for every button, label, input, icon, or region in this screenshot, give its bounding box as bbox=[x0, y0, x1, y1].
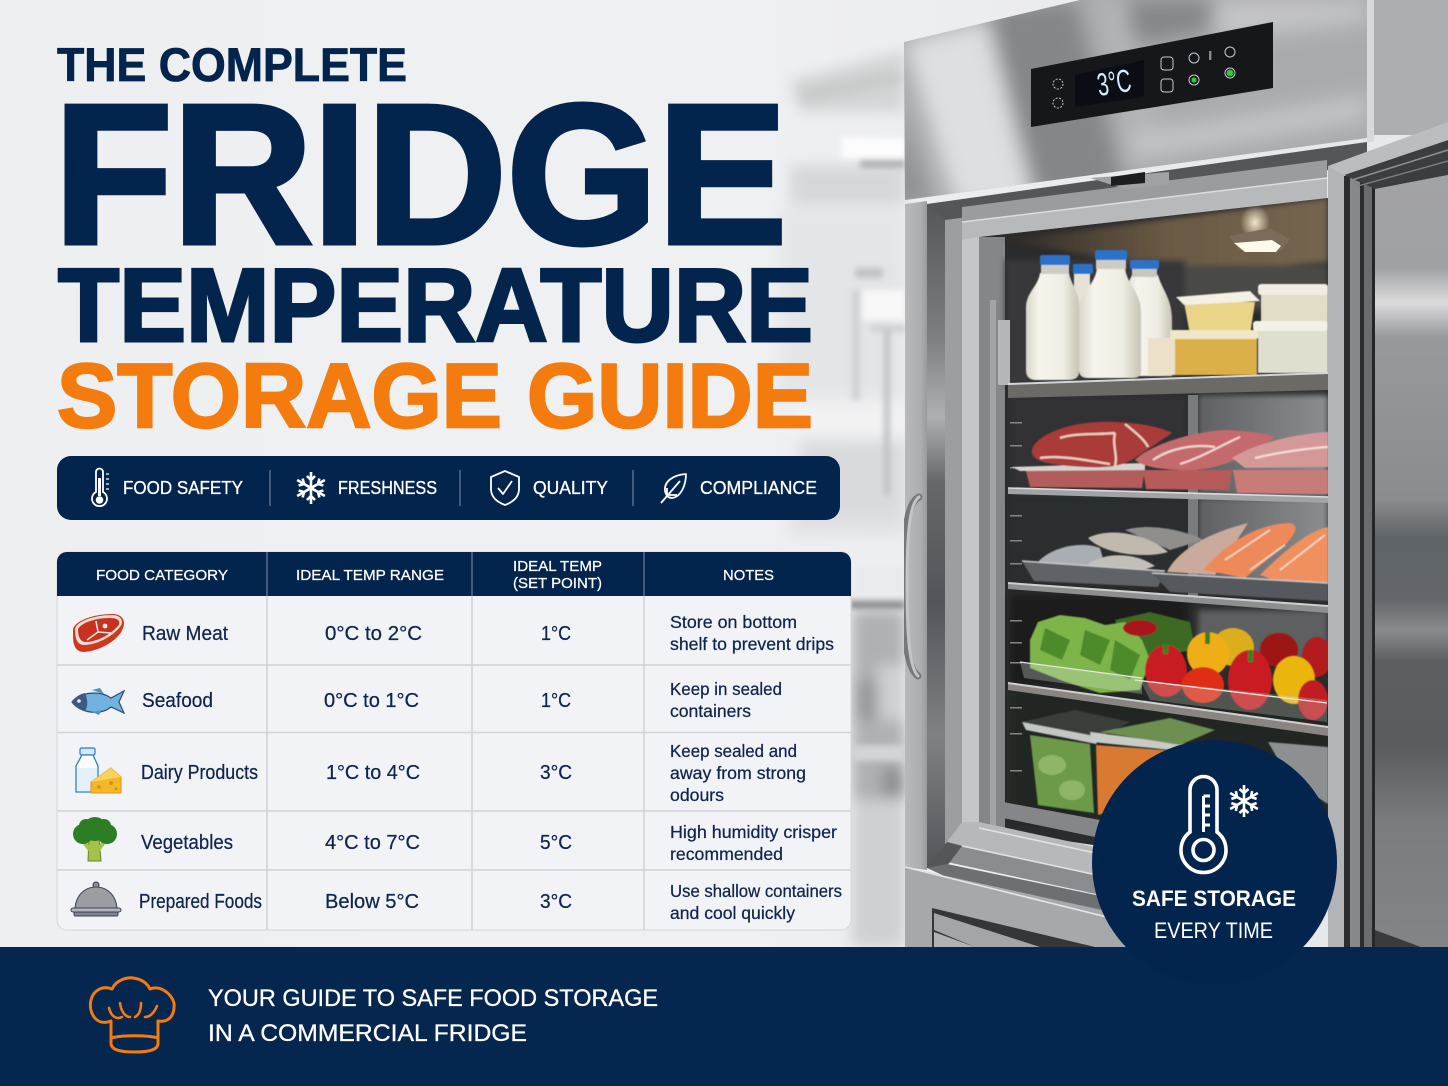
fridge top header panel bbox=[904, 0, 1367, 200]
title line: storage guide: STORAGE GUIDE bbox=[57, 346, 813, 447]
fourth wire shelf bbox=[1008, 683, 1328, 736]
footer text line 1: YOUR GUIDE TO SAFE FOOD STORAGE bbox=[208, 985, 658, 1012]
food storage table bbox=[57, 552, 851, 930]
fridge interior bbox=[979, 198, 1328, 880]
row: raw meat: 1°C bbox=[541, 623, 571, 645]
row: raw meat: Store on bottom bbox=[670, 612, 797, 632]
seafood trays bbox=[1022, 523, 1328, 601]
row: dairy products: Dairy Products bbox=[141, 762, 258, 784]
door top edge bbox=[1344, 140, 1448, 189]
lower vent grille bbox=[932, 908, 1095, 947]
interior floor bbox=[1003, 802, 1100, 838]
row: prepared foods: and cool quickly bbox=[670, 903, 795, 923]
row: seafood bbox=[72, 679, 782, 721]
label: freshness: FRESHNESS bbox=[338, 478, 437, 498]
row: raw meat bbox=[73, 612, 834, 654]
raw meat packs bbox=[1012, 422, 1328, 494]
fridge door handle bbox=[904, 497, 919, 676]
title bbox=[54, 38, 813, 447]
row: prepared foods: Prepared Foods bbox=[139, 891, 262, 913]
temperature reading: 3°C bbox=[1094, 62, 1134, 103]
row: dairy products: Keep sealed and bbox=[670, 741, 797, 761]
label: food safety: FOOD SAFETY bbox=[123, 478, 243, 498]
temperature control panel bbox=[1031, 22, 1273, 127]
fridge left frame bbox=[905, 201, 927, 870]
badge: safe storage every time bbox=[1092, 740, 1337, 985]
icon: steak bbox=[73, 614, 124, 652]
title line: the complete: THE COMPLETE bbox=[57, 38, 407, 91]
row: dairy products: odours bbox=[670, 785, 724, 805]
icon: milk and cheese bbox=[76, 748, 121, 793]
food containers bbox=[1148, 284, 1328, 375]
footer band bbox=[0, 947, 1448, 1086]
open fridge door panel bbox=[1375, 175, 1448, 947]
fridge lower frame bbox=[947, 822, 1093, 874]
icon: chef hat bbox=[90, 978, 174, 1052]
row: seafood: 0°C to 1°C bbox=[324, 690, 419, 712]
row: vegetables bbox=[73, 817, 837, 864]
row: seafood: Keep in sealed bbox=[670, 679, 782, 699]
fridge right upper section bbox=[1374, 0, 1448, 135]
commercial fridge illustration bbox=[896, 0, 1448, 950]
label: compliance: COMPLIANCE bbox=[700, 478, 817, 498]
label: quality: QUALITY bbox=[533, 478, 608, 498]
badge heading: SAFE STORAGE bbox=[1132, 886, 1296, 911]
icon: large snowflake bbox=[1228, 785, 1260, 817]
row: raw meat: Raw Meat bbox=[142, 623, 228, 645]
footer text line 2: IN A COMMERCIAL FRIDGE bbox=[208, 1020, 527, 1047]
row: prepared foods bbox=[71, 881, 842, 923]
icon: cloche bbox=[71, 882, 121, 916]
bottom vegetable bins bbox=[1022, 710, 1328, 815]
row: raw meat: shelf to prevent drips bbox=[670, 634, 834, 654]
shelf rail bbox=[998, 320, 1022, 772]
header labels: IDEAL TEMP bbox=[513, 558, 602, 575]
badge subheading: EVERY TIME bbox=[1154, 918, 1273, 943]
lettuce and peppers bbox=[1030, 612, 1332, 720]
interior left wall bbox=[979, 237, 1005, 837]
vegetable trays bbox=[1020, 662, 1142, 694]
panel buttons bbox=[1053, 47, 1235, 108]
top wire shelf bbox=[1008, 373, 1328, 398]
row: vegetables: 4°C to 7°C bbox=[325, 832, 420, 854]
header labels: FOOD CATEGORY bbox=[96, 567, 228, 584]
row: prepared foods: 3°C bbox=[540, 891, 572, 913]
row: dairy products: away from strong bbox=[670, 763, 806, 783]
icon: shield bbox=[491, 471, 519, 505]
ceiling lamp bbox=[1229, 228, 1290, 252]
row: dairy products: 3°C bbox=[540, 762, 572, 784]
blurred kitchen background bbox=[780, 50, 905, 947]
interior contents bbox=[979, 198, 1332, 840]
row: raw meat: 0°C to 2°C bbox=[325, 623, 422, 645]
icon: fish bbox=[72, 688, 124, 715]
digital display bbox=[1075, 60, 1144, 107]
icon: leaf bbox=[661, 474, 686, 503]
second wire shelf bbox=[1008, 488, 1328, 503]
door latch bbox=[1090, 172, 1169, 187]
row: prepared foods: Use shallow containers bbox=[670, 881, 842, 901]
table header row bbox=[57, 552, 851, 596]
header labels: IDEAL TEMP RANGE bbox=[296, 567, 444, 584]
header labels bbox=[96, 558, 774, 592]
icon: broccoli bbox=[73, 817, 117, 861]
milk bottles bbox=[1026, 250, 1172, 380]
row: vegetables: Vegetables bbox=[141, 832, 233, 854]
fridge door frame top bbox=[927, 142, 1367, 220]
row: prepared foods: Below 5°C bbox=[325, 891, 419, 913]
icon: snowflake bbox=[295, 472, 327, 504]
row: seafood: containers bbox=[670, 701, 751, 721]
row: seafood: Seafood bbox=[142, 690, 213, 712]
benefits pill bar bbox=[57, 456, 840, 520]
right side jamb bbox=[1328, 166, 1344, 947]
row: vegetables: High humidity crisper bbox=[670, 822, 837, 842]
third wire shelf bbox=[1008, 583, 1328, 613]
icon: thermometer bbox=[92, 468, 109, 506]
row: vegetables: recommended bbox=[670, 844, 783, 864]
header labels: (SET POINT) bbox=[513, 575, 602, 592]
interior back wall sections bbox=[1005, 198, 1328, 820]
title line: temperature: TEMPERATURE bbox=[58, 248, 813, 364]
title line: fridge: FRIDGE bbox=[54, 64, 787, 286]
icon: large thermometer bbox=[1181, 776, 1226, 873]
row: dairy products: 1°C to 4°C bbox=[326, 762, 420, 784]
header labels: NOTES bbox=[723, 567, 774, 584]
row: vegetables: 5°C bbox=[540, 832, 572, 854]
row: seafood: 1°C bbox=[541, 690, 571, 712]
row: dairy products bbox=[76, 741, 806, 805]
